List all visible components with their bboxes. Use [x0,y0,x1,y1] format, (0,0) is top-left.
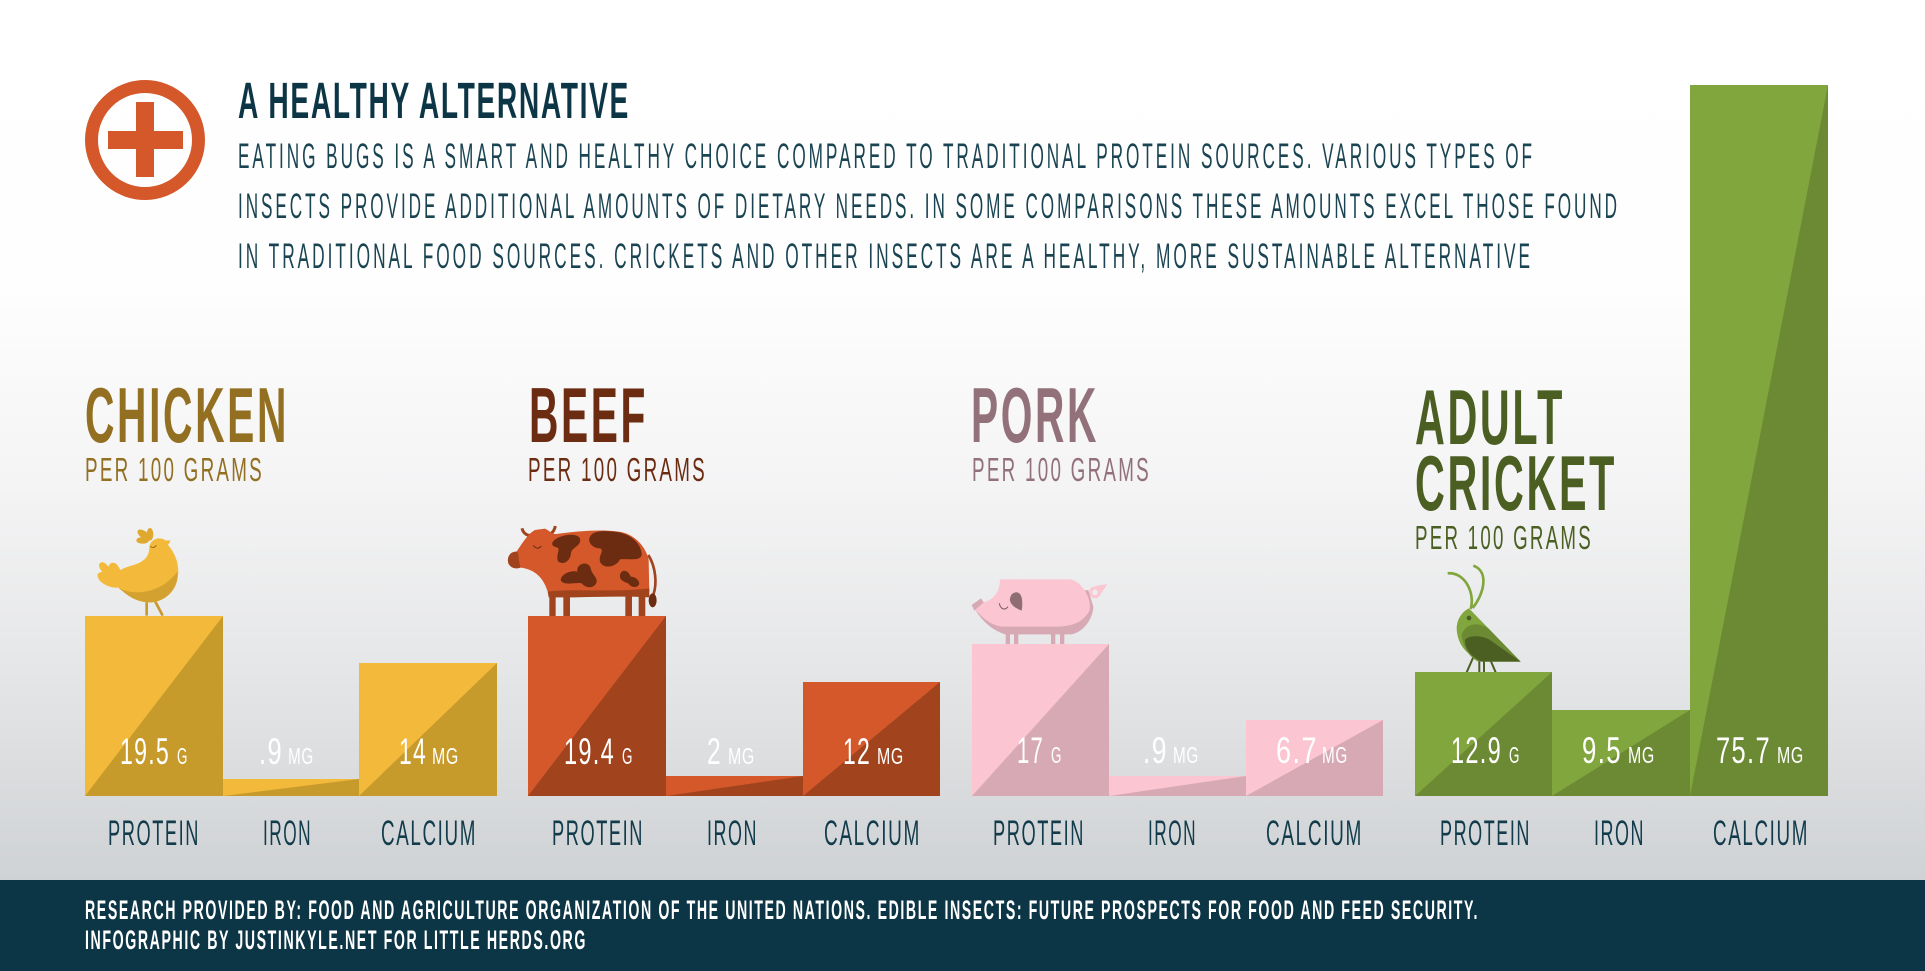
axis labels: pork: CALCIUM [1266,814,1363,853]
footer: credits: INFOGRAPHIC BY JUSTINKYLE.NET FOR LITTLE HERDS.ORG [85,925,587,955]
bar: chicken protein: 19.5 [120,731,170,772]
axis labels: pork [993,814,1363,853]
bar: beef iron [666,731,803,796]
axis labels: chicken [108,814,477,853]
axis labels: cricket: PROTEIN [1440,814,1531,853]
axis labels: beef: CALCIUM [824,814,921,853]
axis labels: chicken: CALCIUM [381,814,477,853]
bar: chicken calcium: MG [432,743,459,769]
axis labels: beef: PROTEIN [552,814,644,853]
bar: cricket calcium: 75.7 [1716,730,1771,771]
icon: cow [508,526,657,619]
bar: pork calcium: 6.7 [1276,730,1318,771]
bar: cricket protein [1415,672,1552,796]
bar: chicken iron [223,731,359,796]
axis labels: cricket: CALCIUM [1713,814,1809,853]
bar: chicken iron: .9 [259,731,283,772]
axis labels: chicken: IRON [263,814,312,853]
bar: cricket protein: G [1509,742,1520,768]
icon: chicken [97,528,178,616]
bar: cricket iron: MG [1628,742,1655,768]
heading: adult cricket: ADULT [1415,373,1565,461]
bar: pork protein: 17 [1017,730,1044,771]
bar: pork calcium [1246,720,1383,796]
subheading: chicken per 100 grams: PER 100 GRAMS [85,451,264,488]
panel: beef [508,371,940,853]
bar: chicken protein [85,616,223,796]
heading: adult cricket: CRICKET [1415,439,1617,527]
bar: beef protein [528,616,666,796]
bar: beef calcium [803,682,940,796]
axis labels: beef [552,814,921,853]
bar: cricket iron [1552,710,1690,796]
bar: pork calcium: MG [1322,742,1348,768]
bar: beef calcium: 12 [843,731,871,772]
panel: chicken [85,371,497,853]
heading: beef: BEEF [529,371,648,459]
intro text block [238,137,1620,276]
footer: credits [0,880,1925,971]
title: A HEALTHY ALTERNATIVE [238,72,630,129]
bar: beef iron: 2 [707,731,722,772]
bar: pork protein [972,644,1109,796]
bar: chicken calcium [359,663,497,796]
bar: beef calcium: MG [877,743,904,769]
bar: beef protein: G [622,743,633,769]
axis labels: pork: IRON [1148,814,1197,853]
icon: medical plus [92,86,198,194]
bar: pork iron [1109,730,1246,796]
axis labels: beef: IRON [707,814,758,853]
icon: pig [972,579,1107,645]
bar: chicken calcium: 14 [399,731,427,772]
bar: cricket calcium [1690,85,1828,796]
heading: chicken: CHICKEN [85,371,289,459]
bar: beef iron: MG [728,743,755,769]
icon: cricket [1448,566,1521,672]
heading: pork: PORK [971,371,1099,459]
panel: pork [971,371,1383,853]
heading: adult cricket [1415,373,1617,527]
axis labels: cricket [1440,814,1809,853]
subheading: pork per 100 grams: PER 100 GRAMS [972,451,1151,488]
bar: beef protein: 19.4 [564,731,615,772]
bar: cricket calcium: MG [1777,742,1804,768]
axis labels: chicken: PROTEIN [108,814,200,853]
subheading: beef per 100 grams: PER 100 GRAMS [528,451,707,488]
bar: pork iron: .9 [1143,730,1168,771]
bar: cricket protein: 12.9 [1451,730,1502,771]
axis labels: cricket: IRON [1594,814,1645,853]
axis labels: pork: PROTEIN [993,814,1085,853]
bar: chicken protein: G [177,743,188,769]
bar: pork iron: MG [1173,742,1199,768]
subheading: cricket per 100 grams: PER 100 GRAMS [1415,519,1593,556]
panel: adult cricket [1415,85,1828,853]
bar: pork protein: G [1051,742,1062,768]
bar: cricket iron: 9.5 [1582,730,1622,771]
bar: chicken iron: MG [288,743,314,769]
